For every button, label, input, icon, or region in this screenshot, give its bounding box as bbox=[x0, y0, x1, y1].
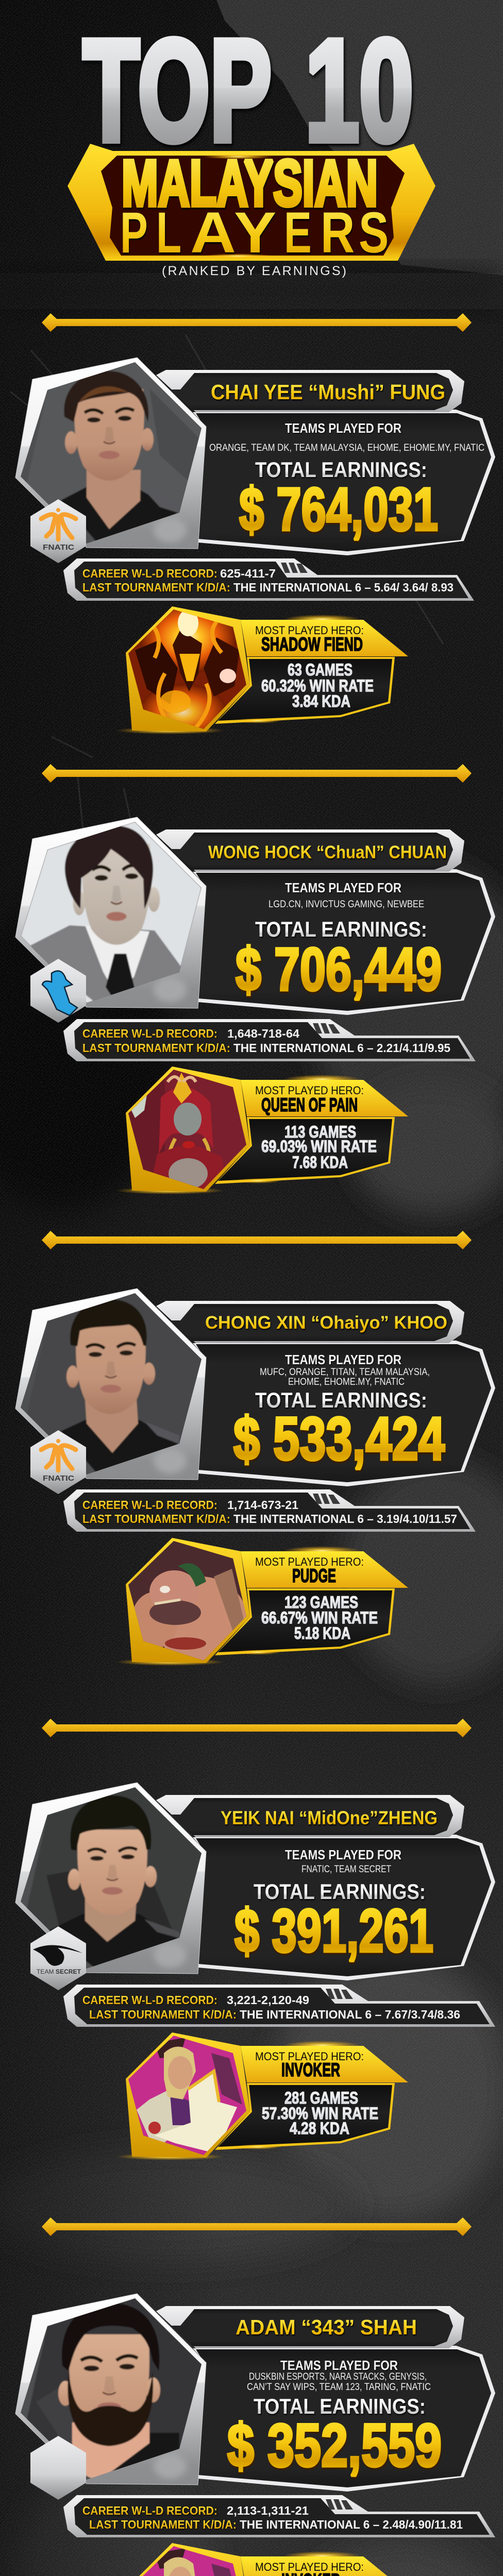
stats panel: THE INTERNATIONAL 6 – 7.67/3.74/8.36 bbox=[240, 2008, 460, 2021]
hero card: Invoker bbox=[116, 2543, 408, 2576]
stats panel: 625-411-7 bbox=[220, 567, 276, 580]
teams heading: TEAMS PLAYED FOR bbox=[285, 880, 401, 895]
team badge: Fnatic: FNATIC bbox=[43, 543, 74, 552]
title banner: Malaysian Players: L bbox=[156, 200, 181, 265]
teams list: CAN’T SAY WIPS, TEAM 123, TARING, FNATIC bbox=[247, 2382, 431, 2393]
title banner: Malaysian Players: R bbox=[321, 200, 355, 265]
earnings amount: $ 706,449 bbox=[236, 936, 442, 1004]
player name: WONG HOCK “ChuaN” CHUAN bbox=[208, 842, 447, 862]
total earnings label: TOTAL EARNINGS: bbox=[254, 2394, 426, 2418]
title banner: Malaysian Players: S bbox=[359, 201, 389, 265]
stats panel: 1,648-718-64 bbox=[227, 1027, 299, 1040]
teams list: FNATIC, TEAM SECRET bbox=[301, 1864, 391, 1875]
hero card: Shadow Fiend: 3.84 KDA bbox=[292, 692, 350, 710]
stats panel bbox=[63, 1489, 476, 1532]
portrait: 343 bbox=[21, 2298, 202, 2485]
portrait: ChuaN bbox=[21, 822, 202, 1009]
panel: player 3 Ohaiyo bbox=[15, 1289, 495, 1666]
stats panel: 1,714-673-21 bbox=[227, 1498, 298, 1512]
stats panel bbox=[63, 1985, 495, 2027]
hero art bbox=[124, 2543, 253, 2576]
earnings amount: $ 352,559 bbox=[227, 2412, 442, 2480]
stats panel: CAREER W-L-D RECORD: bbox=[82, 1027, 217, 1040]
team badge: blank bbox=[30, 2436, 86, 2500]
teams list bbox=[260, 1367, 430, 1387]
total earnings label: TOTAL EARNINGS: bbox=[255, 1388, 427, 1412]
player name: CHONG XIN “Ohaiyo” KHOO bbox=[205, 1313, 447, 1333]
panel: player 1 Mushi bbox=[15, 358, 495, 740]
total earnings label: TOTAL EARNINGS: bbox=[255, 457, 427, 482]
title banner: Malaysian Players: Y bbox=[234, 200, 276, 265]
stats panel: THE INTERNATIONAL 6 – 5.64/ 3.64/ 8.93 bbox=[233, 581, 454, 594]
hero card: Invoker bbox=[116, 2032, 408, 2160]
hero stats: 123 GAMES bbox=[284, 1593, 358, 1612]
hero card: Shadow Fiend: 60.32% WIN RATE bbox=[261, 676, 374, 695]
panel: player 2 ChuaN bbox=[15, 817, 495, 1194]
stats panel bbox=[63, 2495, 495, 2537]
stats panel: THE INTERNATIONAL 6 – 2.21/4.11/9.95 bbox=[233, 1041, 450, 1055]
stats panel: LAST TOURNAMENT K/D/A: bbox=[82, 1512, 230, 1526]
team badge: Fnatic bbox=[30, 499, 86, 563]
stats panel: CAREER W-L-D RECORD: bbox=[82, 567, 217, 580]
hero stats: 63 GAMES bbox=[288, 660, 353, 679]
stats panel: CAREER W-L-D RECORD: bbox=[82, 1993, 217, 2007]
teams list: EHOME, EHOME.MY, FNATIC bbox=[288, 1377, 405, 1387]
hero label: MOST PLAYED HERO: bbox=[255, 624, 364, 637]
hero card: Pudge bbox=[116, 1538, 408, 1666]
hero card: Queen of Pain bbox=[116, 1066, 408, 1194]
hero art bbox=[128, 1070, 246, 1189]
title banner: Malaysian Players: P bbox=[120, 200, 148, 265]
stats panel bbox=[63, 558, 474, 601]
teams list: MUFC, ORANGE, TITAN, TEAM MALAYSIA, bbox=[260, 1367, 430, 1378]
hero card: Invoker: 4.28 KDA bbox=[290, 2119, 349, 2138]
stats panel: THE INTERNATIONAL 6 – 2.48/4.90/11.81 bbox=[240, 2518, 463, 2531]
stats panel: 3,221-2,120-49 bbox=[227, 1993, 309, 2007]
panel: player 5 343 bbox=[15, 2294, 495, 2576]
hero card: Invoker: INVOKER bbox=[281, 2059, 340, 2080]
portrait: Mushi bbox=[27, 362, 202, 541]
hero art bbox=[124, 2032, 253, 2159]
stats panel: LAST TOURNAMENT K/D/A: bbox=[89, 2008, 237, 2021]
hero card: Queen of Pain: 69.03% WIN RATE bbox=[261, 1137, 377, 1156]
divider 1 bbox=[42, 313, 472, 332]
hero card: Pudge: 5.18 KDA bbox=[294, 1624, 350, 1642]
hero card: Shadow Fiend: SHADOW FIEND bbox=[261, 634, 363, 655]
teams heading: TEAMS PLAYED FOR bbox=[285, 1352, 401, 1367]
hero card: Pudge: 66.67% WIN RATE bbox=[261, 1608, 378, 1627]
hero label: MOST PLAYED HERO: bbox=[255, 2561, 364, 2573]
title banner: Malaysian Players bbox=[68, 144, 435, 265]
team badge: Newbee bbox=[30, 959, 86, 1023]
title banner: Malaysian Players: A bbox=[190, 200, 236, 265]
player name: YEIK NAI “MidOne”ZHENG bbox=[221, 1807, 438, 1828]
divider 5 bbox=[42, 2217, 472, 2236]
hero card: Invoker: 57.30% WIN RATE bbox=[262, 2104, 378, 2123]
stats panel: LAST TOURNAMENT K/D/A: bbox=[82, 581, 230, 594]
earnings amount: $ 533,424 bbox=[233, 1405, 445, 1473]
stats panel: CAREER W-L-D RECORD: bbox=[82, 1498, 217, 1512]
total earnings label: TOTAL EARNINGS: bbox=[254, 1879, 426, 1904]
title banner: Malaysian Players: MALAYSIAN bbox=[122, 147, 378, 219]
stats panel bbox=[63, 1019, 476, 1061]
stats panel: THE INTERNATIONAL 6 – 3.19/4.10/11.57 bbox=[233, 1512, 457, 1526]
subtitle: ranked by earnings: (RANKED BY EARNINGS) bbox=[162, 264, 346, 278]
hero card: Queen of Pain: 7.68 KDA bbox=[292, 1153, 348, 1172]
teams heading: TEAMS PLAYED FOR bbox=[280, 2358, 398, 2373]
hero label: MOST PLAYED HERO: bbox=[255, 1084, 364, 1097]
portrait: MidOne bbox=[21, 1787, 202, 1974]
title: TOP 10: TOP bbox=[83, 10, 272, 171]
player name: CHAI YEE “Mushi” FUNG bbox=[211, 380, 445, 404]
teams heading: TEAMS PLAYED FOR bbox=[285, 1847, 401, 1862]
player name: ADAM “343” SHAH bbox=[236, 2315, 417, 2339]
title: TOP 10: 10 bbox=[305, 10, 413, 171]
team badge: Team Secret: TEAM SECRET bbox=[37, 1968, 81, 1975]
hero card: Pudge: PUDGE bbox=[292, 1565, 336, 1586]
earnings amount: $ 391,261 bbox=[234, 1897, 433, 1965]
hero stats: 113 GAMES bbox=[284, 1123, 356, 1141]
hero label: MOST PLAYED HERO: bbox=[255, 2050, 364, 2063]
divider 2 bbox=[42, 764, 472, 783]
stats panel: CAREER W-L-D RECORD: bbox=[82, 2504, 217, 2517]
earnings amount: $ 764,031 bbox=[239, 476, 438, 544]
hero card: Queen of Pain: QUEEN OF PAIN bbox=[261, 1094, 358, 1115]
panel: player 4 MidOne bbox=[15, 1783, 495, 2160]
stats panel: LAST TOURNAMENT K/D/A: bbox=[89, 2518, 237, 2531]
hero art bbox=[124, 1538, 253, 1664]
team badge: Fnatic bbox=[30, 1430, 86, 1494]
teams heading: TEAMS PLAYED FOR bbox=[285, 420, 401, 436]
title banner: Malaysian Players: E bbox=[284, 200, 312, 265]
team badge: Team Secret bbox=[30, 1926, 86, 1990]
portrait: Ohaiyo bbox=[21, 1293, 202, 1480]
divider 4 bbox=[42, 1719, 472, 1737]
stats panel: 2,113-1,311-21 bbox=[227, 2504, 309, 2517]
teams list bbox=[247, 2371, 431, 2393]
hero art bbox=[128, 609, 246, 729]
hero label: MOST PLAYED HERO: bbox=[255, 1555, 364, 1568]
stats panel: LAST TOURNAMENT K/D/A: bbox=[82, 1041, 230, 1055]
total earnings label: TOTAL EARNINGS: bbox=[255, 917, 427, 941]
hero card: Shadow Fiend bbox=[116, 601, 408, 740]
team badge: Fnatic: FNATIC bbox=[43, 1474, 74, 1483]
divider 3 bbox=[42, 1231, 472, 1249]
teams list: DUSKBIN ESPORTS, NARA STACKS, GENYSIS, bbox=[249, 2371, 427, 2382]
teams list: LGD.CN, INVICTUS GAMING, NEWBEE bbox=[269, 899, 424, 910]
hero stats: 281 GAMES bbox=[284, 2089, 358, 2107]
